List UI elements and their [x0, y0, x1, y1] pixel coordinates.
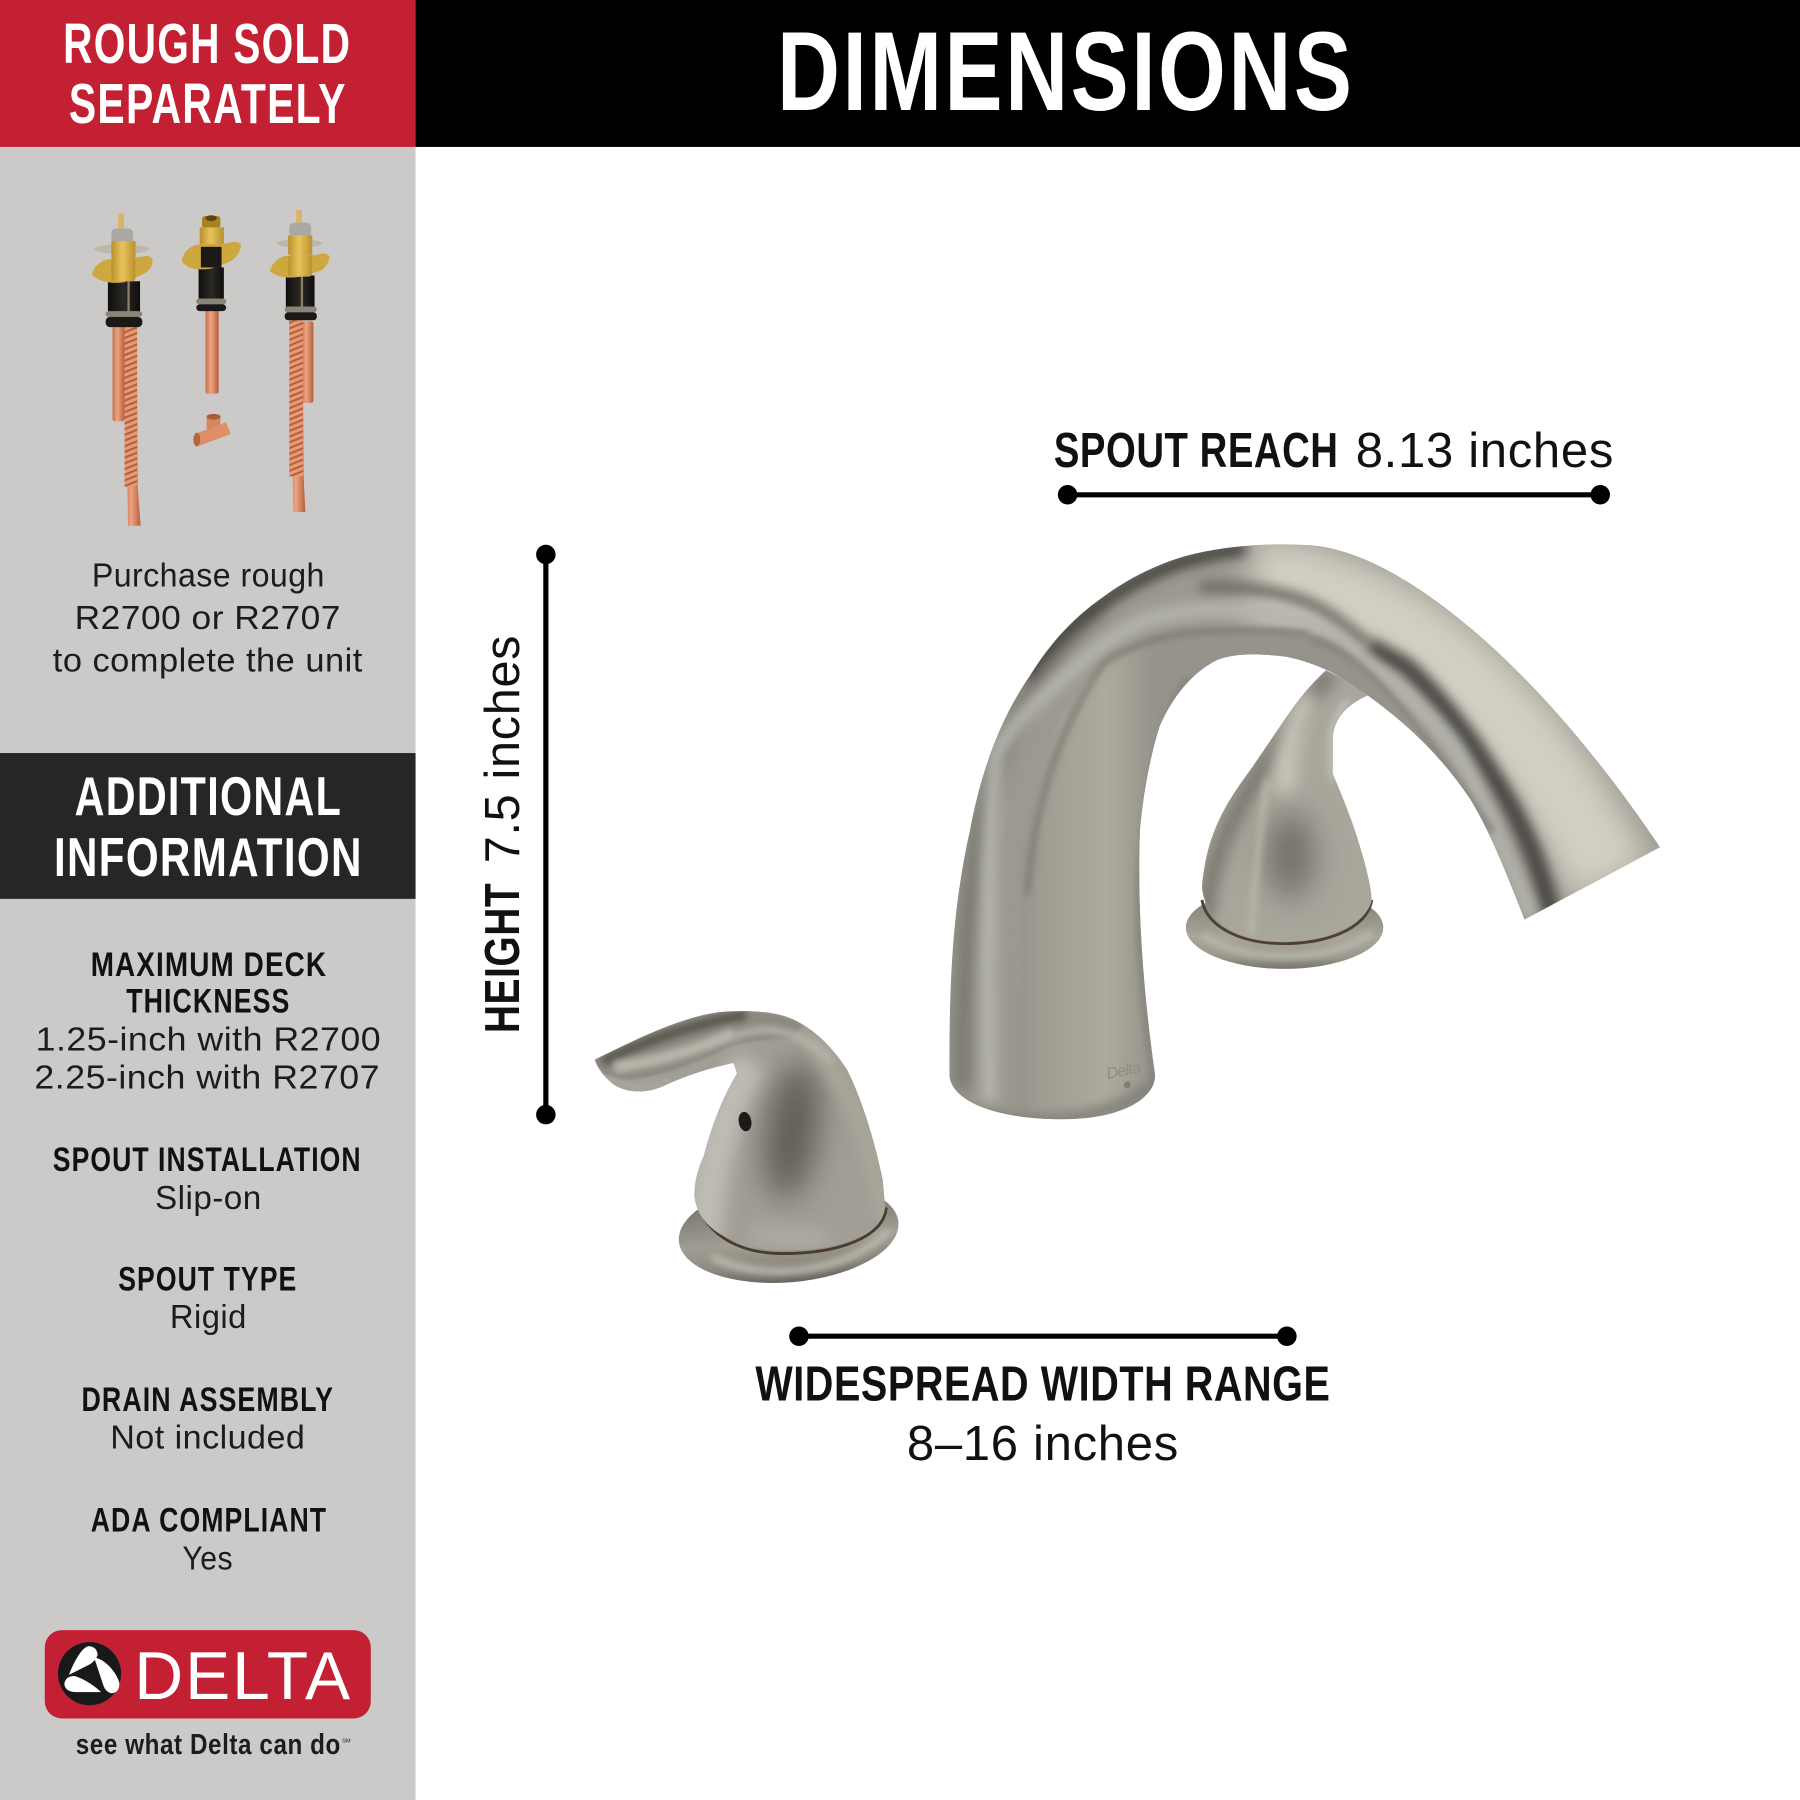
text: purchase rough note: R2700 or R2707 [75, 600, 341, 637]
heading: additional information: INFORMATION [54, 826, 363, 888]
dimension: height [475, 545, 556, 1124]
image: spout [949, 544, 1660, 1120]
heading: additional information: ADDITIONAL [75, 765, 342, 827]
dimension: widespread width range: WIDESPREAD WIDTH RANGE [755, 1357, 1330, 1412]
dimension: widespread width range: 8–16 inches [907, 1416, 1179, 1471]
spec: spout type: Rigid [170, 1299, 247, 1336]
text: purchase rough note [53, 558, 363, 680]
dimension: spout reach: SPOUT REACH [1054, 423, 1339, 478]
spec: spout type [118, 1260, 297, 1336]
sidebar background panel [0, 0, 416, 1800]
image: rough valve kit [92, 210, 329, 526]
spec: spout type: SPOUT TYPE [118, 1260, 297, 1298]
spec: spout installation [53, 1141, 362, 1217]
valve 3 [270, 210, 329, 512]
spec: drain assembly: Not included [110, 1420, 305, 1457]
tagline: see what Delta can do [76, 1729, 341, 1761]
tagline: SM [342, 1739, 351, 1745]
image: front handle [585, 1004, 903, 1292]
logo: delta: DELTA [134, 1639, 351, 1714]
text: purchase rough note: Purchase rough [92, 558, 325, 595]
copper tee fitting [193, 414, 228, 447]
valve 1 [92, 214, 153, 526]
spec: maximum deck thickness: 2.25-inch with R2707 [34, 1059, 380, 1096]
spec: ada compliant: ADA COMPLIANT [91, 1501, 327, 1539]
spec: ada compliant [91, 1501, 327, 1577]
spec: maximum deck thickness: THICKNESS [126, 983, 290, 1021]
dimension: height: 7.5 inches [475, 635, 530, 863]
image: rear handle [1186, 660, 1383, 969]
spec: drain assembly [82, 1381, 334, 1457]
spec: spout installation: Slip-on [155, 1180, 262, 1217]
spec: drain assembly: DRAIN ASSEMBLY [82, 1381, 334, 1419]
dimension: widespread width range [755, 1326, 1330, 1471]
valve 2 [181, 215, 241, 394]
heading: additional information [0, 753, 416, 899]
image: spout: Delta [1105, 1058, 1142, 1083]
spec: maximum deck thickness [34, 946, 381, 1096]
spec: maximum deck thickness: MAXIMUM DECK [91, 946, 327, 984]
title banner: dimensions: DIMENSIONS [777, 8, 1355, 134]
dimension: spout reach [1054, 423, 1614, 505]
banner: rough sold separately [0, 0, 416, 147]
dimension: height: HEIGHT [475, 883, 530, 1033]
banner: rough sold separately: SEPARATELY [69, 72, 347, 135]
spec: spout installation: SPOUT INSTALLATION [53, 1141, 362, 1179]
logo: delta [45, 1630, 371, 1718]
banner: rough sold separately: ROUGH SOLD [63, 12, 351, 75]
text: purchase rough note: to complete the unit [53, 643, 363, 680]
title banner: dimensions [416, 0, 1800, 147]
dimension: spout reach: 8.13 inches [1356, 423, 1614, 478]
spec: maximum deck thickness: 1.25-inch with R2700 [36, 1021, 381, 1058]
spec: ada compliant: Yes [183, 1540, 233, 1577]
